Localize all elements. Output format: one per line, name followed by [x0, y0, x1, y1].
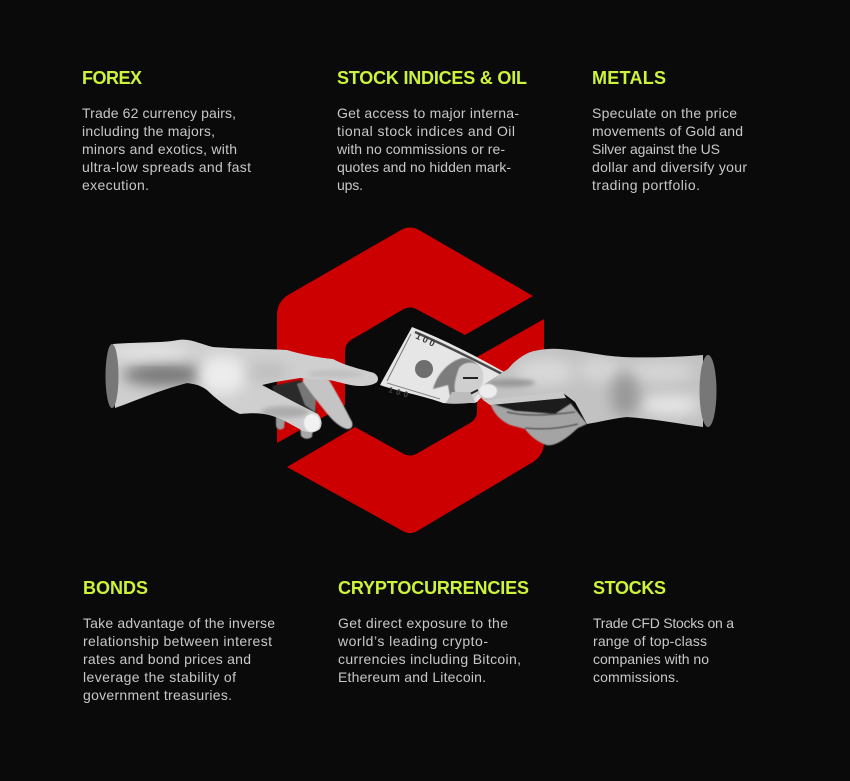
text: forex description [82, 105, 251, 193]
banknote [380, 327, 513, 404]
arm cut [700, 355, 716, 427]
text: stock indices description: with no commissions or re- [336, 141, 505, 157]
text: bonds description: relationship between interest [83, 633, 272, 649]
text: bonds description: Take advantage of the inverse [83, 615, 275, 631]
panel: stocks [593, 578, 734, 685]
text: cryptocurrencies description [337, 615, 521, 685]
text: stock indices description: ups. [337, 177, 363, 193]
text: forex description: execution. [82, 177, 149, 193]
panel: cryptocurrencies [337, 578, 529, 685]
text: stock indices description: Get access to major interna- [337, 105, 519, 121]
text: stock indices description: quotes and no hidden mark- [337, 159, 511, 175]
heading: stocks: STOCKS [593, 578, 666, 598]
logo: red hexagon [277, 228, 544, 533]
text: cryptocurrencies description: currencies including Bitcoin, [338, 651, 521, 667]
seal [415, 360, 433, 378]
middle finger [303, 378, 352, 429]
heading: cryptocurrencies: CRYPTOCURRENCIES [338, 578, 529, 598]
hand and wrist [478, 348, 703, 427]
text: metals description: movements of Gold and [592, 123, 743, 139]
illustration: dollar bill [380, 327, 513, 404]
text: bonds description: government treasuries. [83, 687, 232, 703]
hand and thumb [113, 340, 378, 432]
text: bonds description: rates and bond prices and [83, 651, 251, 667]
text: bonds description: leverage the stability of [83, 669, 236, 685]
text: metals description: dollar and diversify your [592, 159, 747, 175]
panel: stock indices and oil [336, 68, 527, 193]
text: forex description: minors and exotics, with [82, 141, 237, 157]
text: stocks description: companies with no [593, 651, 709, 667]
text: stock indices description: tional stock indices and Oil [337, 123, 515, 139]
panel: forex [82, 68, 251, 193]
text: metals description: trading portfolio. [592, 177, 700, 193]
text: stocks description: range of top-class [593, 633, 707, 649]
illustration: left hand [106, 340, 378, 440]
illustration: right hand [478, 348, 716, 446]
portrait [433, 358, 483, 403]
text: metals description: Silver against the US [592, 141, 720, 157]
text: stock indices description [336, 105, 519, 193]
panel: bonds [83, 578, 275, 703]
heading: metals: METALS [592, 68, 666, 88]
thumb nail [479, 384, 497, 398]
text: cryptocurrencies description: Get direct exposure to the [338, 615, 508, 631]
text: forex description: Trade 62 currency pairs, [82, 105, 236, 121]
denomination: top: 100 [414, 331, 436, 349]
heading: stock indices and oil: STOCK INDICES & OIL [337, 68, 527, 88]
fingernail [304, 414, 320, 432]
text: cryptocurrencies description: world’s leading crypto- [337, 633, 488, 649]
text: metals description [592, 105, 747, 193]
text: forex description: ultra-low spreads and fast [82, 159, 251, 175]
panel: metals [592, 68, 747, 193]
denomination: bottom: 100 [387, 385, 410, 400]
heading: forex: FOREX [82, 68, 142, 88]
text: metals description: Speculate on the price [592, 105, 737, 121]
small fingers [272, 380, 318, 439]
text: stocks description: commissions. [593, 669, 679, 685]
text: bonds description [83, 615, 275, 703]
text: cryptocurrencies description: Ethereum and Litecoin. [338, 669, 486, 685]
heading: bonds: BONDS [83, 578, 148, 598]
text: stocks description [593, 615, 734, 685]
arm cut [106, 344, 118, 408]
lower fingers [490, 396, 587, 445]
text: stocks description: Trade CFD Stocks on a [593, 615, 734, 631]
folded bill edge [483, 392, 566, 405]
text: forex description: including the majors, [82, 123, 215, 139]
